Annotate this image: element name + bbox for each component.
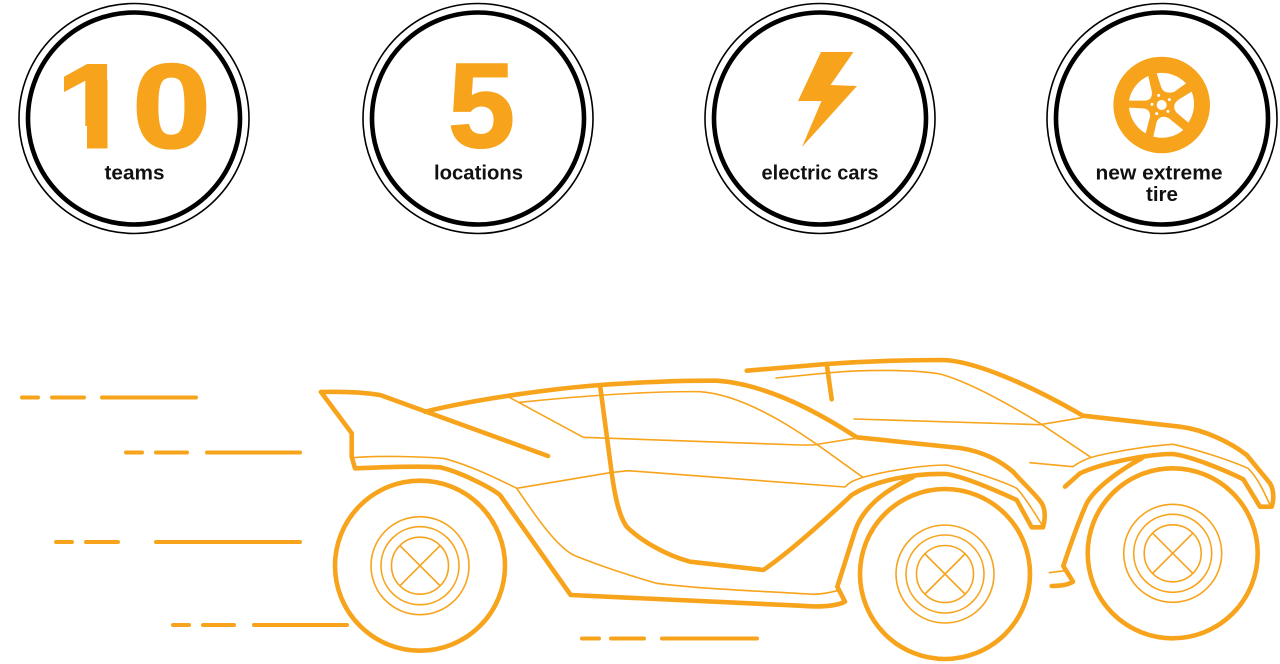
stat badge: new extreme tire: tire xyxy=(1146,184,1178,206)
stat badge: 10 teams: teams xyxy=(104,162,164,184)
stat badge: 10 teams xyxy=(19,4,249,234)
stat badge: new extreme tire xyxy=(1047,4,1277,234)
stat badge: electric cars: electric cars xyxy=(762,162,878,184)
middle wheel xyxy=(860,489,1030,659)
stat badge: new extreme tire: new extreme xyxy=(1096,162,1222,184)
body detail lines xyxy=(353,392,1043,594)
front wheel xyxy=(1088,468,1258,638)
stat badge: 10 teams: 10 xyxy=(53,40,211,174)
stat badge: electric cars xyxy=(705,4,935,234)
stat badge: 5 locations: 5 xyxy=(448,39,515,173)
speed lines xyxy=(22,398,757,638)
car illustration: front car body xyxy=(747,360,1273,659)
rear wheel xyxy=(335,481,505,651)
stat badge: 5 locations: locations xyxy=(434,162,523,184)
stat badge: 5 locations xyxy=(363,4,593,234)
front body detail lines xyxy=(776,370,1270,573)
car illustration: rear car body xyxy=(321,381,1045,651)
